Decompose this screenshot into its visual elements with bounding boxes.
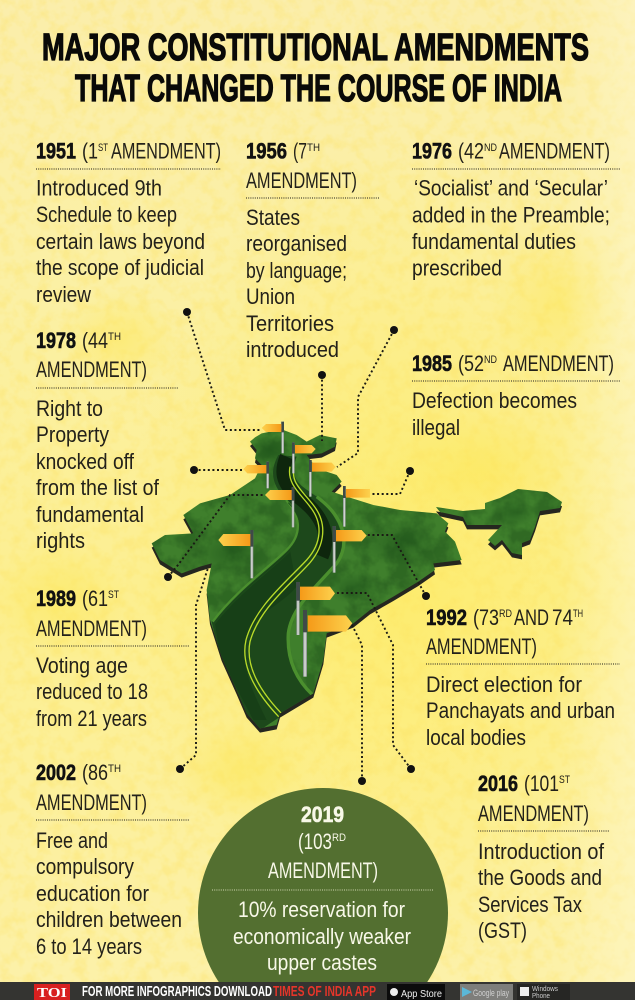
road band and mainland texture — [150, 428, 463, 730]
panel: 1978: fundamental — [36, 502, 144, 527]
panel: 1992: AMENDMENT) — [426, 634, 537, 659]
panel: 1985 — [412, 351, 620, 440]
panel: 1976: ‘Socialist’ and ‘Secular’ — [414, 176, 608, 200]
panel: 2019 green circle: 2019 — [301, 802, 344, 827]
panel: 2019 green circle: upper castes — [267, 950, 377, 975]
panel: 1956: States — [246, 205, 300, 230]
panel: 1956: Territories — [246, 311, 334, 336]
panel: 1976: added in the Preamble; — [412, 202, 610, 228]
panel: 1951: review — [36, 282, 91, 307]
Windows Phone badge — [517, 984, 570, 1000]
leader lines and dots — [164, 308, 430, 785]
Windows Phone badge: Phone — [532, 993, 550, 1000]
panel: 1992 — [426, 605, 620, 750]
panel: 1978: Right to — [36, 396, 103, 421]
panel: 2016: Introduction of — [478, 839, 605, 864]
Windows Phone badge: Windows — [532, 986, 558, 993]
panel: 1956: by language; — [246, 258, 347, 283]
panel: 1992: AND — [514, 605, 549, 630]
panel: 2016: (GST) — [478, 918, 527, 943]
panel: 1976: fundamental duties — [412, 229, 576, 254]
panel: 2002: children between — [36, 907, 182, 932]
panel: 2016: Services Tax — [478, 892, 582, 917]
flag 2 — [292, 442, 316, 473]
panel: 1956: (7 — [293, 138, 307, 164]
panel: 1992: 1992 — [426, 605, 467, 630]
panel: 1992: 74 — [552, 605, 573, 630]
panel: 2002: education for — [36, 881, 149, 906]
panel: 1989: Voting age — [36, 653, 128, 678]
panel: 1989: (61 — [82, 586, 108, 611]
panel: 1956: introduced — [246, 337, 339, 362]
panel: 1978: rights — [36, 528, 85, 553]
panel: 2016: (101 — [524, 771, 559, 796]
panel: 1956: TH — [307, 142, 320, 154]
panel: 1985: 1985 — [412, 351, 452, 376]
panel: 2019 green circle — [198, 788, 448, 1000]
panel: 2016 — [478, 771, 610, 943]
panel: 1989: AMENDMENT) — [36, 616, 147, 641]
panel: 1989: reduced to 18 — [36, 679, 148, 704]
map of India with road and flags — [150, 422, 563, 733]
footer promo text: TIMES OF INDIA APP — [273, 983, 376, 1000]
panel: 1989 — [36, 586, 190, 731]
panel: 1951: Schedule to keep — [36, 202, 177, 227]
Google Play badge: Google play — [473, 988, 509, 998]
panel: 1992: (73 — [473, 605, 499, 630]
flag 5 — [265, 487, 294, 527]
panel: 1992: TH — [573, 608, 583, 620]
panel: 1951: ST — [98, 142, 108, 154]
panel: 1989: ST — [108, 589, 119, 601]
map extrusion shadow — [152, 434, 562, 733]
panel: 1978: knocked off — [36, 449, 135, 474]
flag 4 — [309, 460, 336, 497]
panel: 1978: (44 — [82, 328, 108, 353]
title — [42, 27, 589, 110]
panel: 1989: from 21 years — [36, 706, 147, 731]
panel: 2002: AMENDMENT) — [36, 790, 147, 815]
panel: 1978 — [36, 328, 178, 553]
flag 3 — [243, 462, 269, 488]
Google Play badge — [460, 984, 513, 1000]
panel: 2016: AMENDMENT) — [478, 801, 589, 826]
panel: 1976: prescribed — [412, 256, 502, 280]
panel: 1985: illegal — [412, 415, 460, 440]
panel: 1951: certain laws beyond — [36, 229, 205, 254]
panel: 1978: Property — [36, 422, 109, 447]
panel: 1956: Union — [246, 284, 295, 309]
flag 1 — [262, 422, 284, 453]
mainland map — [152, 429, 462, 728]
panel: 1985: ND — [484, 354, 497, 366]
panel: 2002: 2002 — [36, 760, 76, 785]
panel: 1951: (1 — [82, 138, 98, 164]
panel: 1978: 1978 — [36, 328, 76, 353]
panel: 1951: 1951 — [36, 138, 76, 164]
panel: 1951: Introduced 9th — [36, 176, 162, 200]
panel: 1992: Direct election for — [426, 672, 582, 697]
App Store badge: App Store — [401, 989, 442, 1000]
panel: 1951: AMENDMENT) — [111, 138, 221, 164]
panel: 2019 green circle: AMENDMENT) — [268, 858, 378, 883]
panel: 1951 — [36, 138, 221, 307]
panel: 2002 — [36, 760, 190, 959]
panel: 2016: ST — [559, 774, 570, 786]
panel: 2002: compulsory — [36, 854, 134, 879]
footer bar — [0, 982, 635, 1000]
panel: 2019 green circle: economically weaker — [233, 924, 411, 949]
panel: 1985: (52 — [458, 351, 484, 376]
flag 8 — [333, 526, 367, 573]
TOI logo — [34, 984, 70, 1000]
panel: 1956: reorganised — [246, 231, 347, 256]
panel: 2019 green circle: RD — [332, 832, 346, 844]
panel: 2002: 6 to 14 years — [36, 934, 142, 959]
panel: 2002: TH — [108, 763, 121, 775]
panel: 2019 green circle: 10% reservation for — [238, 897, 405, 922]
flag 9 — [296, 582, 335, 635]
panel: 1976: (42 — [458, 138, 484, 164]
panel: 1985: Defection becomes — [412, 388, 577, 413]
panel: 1978: TH — [108, 331, 121, 343]
App Store badge — [387, 984, 445, 1000]
panel: 2016: 2016 — [478, 771, 518, 796]
panel: 1976 — [412, 138, 620, 280]
panel: 1989: 1989 — [36, 586, 76, 611]
panel: 1956: 1956 — [246, 138, 287, 164]
panel: 1978: AMENDMENT) — [36, 357, 147, 382]
panel: 1956: AMENDMENT) — [246, 168, 357, 193]
footer promo text: FOR MORE INFOGRAPHICS DOWNLOAD — [82, 983, 272, 1000]
north-east mottled texture — [433, 487, 563, 557]
panel: 2016: the Goods and — [478, 865, 602, 890]
north-east map — [436, 489, 562, 555]
flag 7 — [218, 530, 253, 578]
panel: 1992: local bodies — [426, 725, 526, 750]
panel: 1978: from the list of — [36, 475, 160, 500]
panel: 1976: ND — [484, 142, 497, 154]
panel: 2002: (86 — [82, 760, 108, 785]
panel: 1992: RD — [499, 608, 512, 620]
panel: 2019 green circle: (103 — [298, 829, 332, 854]
panel: 1956 — [246, 138, 380, 362]
flag 6 — [343, 486, 370, 527]
panel: 2002: Free and — [36, 828, 108, 853]
panel: 1951: the scope of judicial — [36, 255, 204, 280]
panel: 1976: 1976 — [412, 138, 452, 164]
flag 10 — [303, 610, 352, 677]
